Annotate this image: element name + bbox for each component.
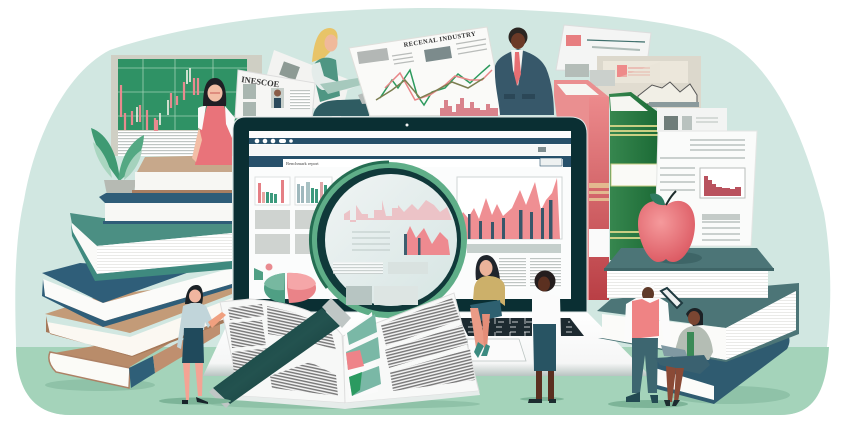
laptop base: [203, 312, 650, 376]
laptop: [203, 117, 650, 376]
grey cards: [255, 210, 332, 254]
book: teal: [70, 213, 232, 281]
person: woman in pink dress on book: [192, 78, 235, 165]
book: large teal-grey: [597, 283, 799, 362]
person: small woman with glasses: [159, 285, 231, 404]
laptop bezel: [233, 117, 587, 312]
magnifying glass: [209, 162, 467, 408]
plant: [91, 128, 144, 205]
screen: Benchmark report: [286, 161, 319, 166]
handle: [209, 298, 351, 408]
newspaper: chart and masthead: RECENAL INDUSTRY: [403, 31, 477, 49]
back report sheets: [556, 25, 701, 108]
stock chart board: [111, 55, 262, 156]
open newspaper: right page: [343, 293, 480, 409]
book: bottom with navy spine: [48, 320, 220, 388]
book: top teal-grey: [604, 248, 774, 298]
big chart: [457, 177, 562, 239]
person: man in suit: [495, 28, 554, 115]
mini chart middle: [295, 177, 332, 205]
mini chart left: [255, 177, 290, 205]
book: navy flat: [99, 193, 232, 224]
book: beige top: [132, 155, 232, 193]
book: navy bottom: [655, 333, 790, 404]
pie chart: [254, 264, 316, 303]
newspaper: headline and portraits: [235, 70, 315, 118]
report pages right: [655, 108, 757, 246]
back newspaper with portrait: [264, 50, 350, 120]
person: seated woman with laptop: [655, 308, 713, 406]
book: tan: [45, 280, 232, 357]
screen: [249, 131, 571, 303]
ground shadows: [45, 379, 790, 409]
left stack of books: [42, 155, 232, 388]
keyboard: [459, 318, 584, 336]
newspaper: chart and masthead: [349, 27, 504, 116]
open newspaper: left page: [220, 299, 346, 409]
trackpad: [467, 339, 526, 361]
small magnifier: [661, 288, 682, 308]
person: seated woman on laptop: [470, 255, 505, 358]
person: older man with magnifier: [608, 282, 688, 408]
person: standing woman: [520, 270, 564, 403]
person: blonde woman with laptop: [312, 28, 380, 116]
lens glass with magnified content: [325, 174, 457, 306]
right stack of books: [597, 248, 799, 404]
pink book: [554, 80, 609, 300]
book: navy tilted: [42, 263, 232, 327]
apple: [638, 191, 695, 262]
lens ring: [310, 162, 467, 318]
green book: [609, 92, 658, 260]
newspaper: headline and portraits: INESCOE: [241, 74, 280, 89]
text panels lower right: [467, 244, 561, 288]
